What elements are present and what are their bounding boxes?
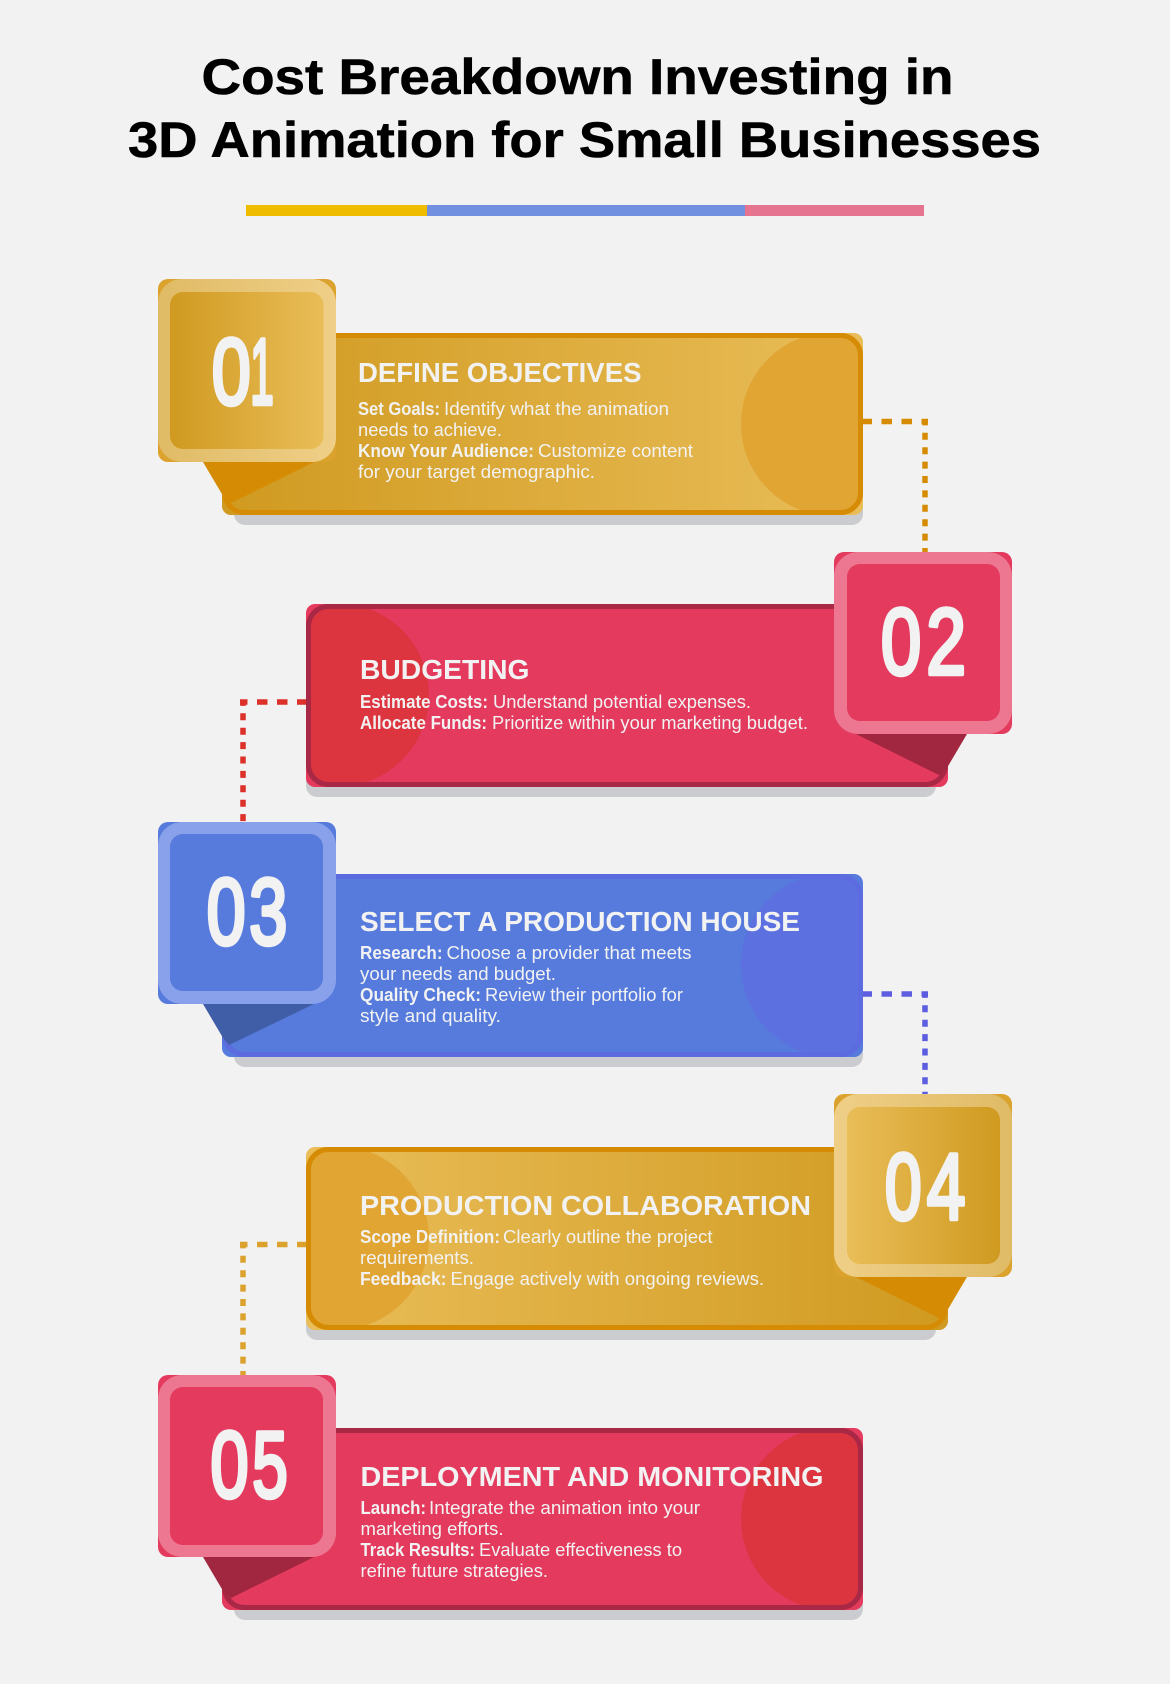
badge 02: 0 (881, 589, 921, 694)
body text (360, 1498, 700, 1581)
panel: step 2 budgeting (245, 552, 1012, 797)
body text: Launch: (360, 1498, 426, 1518)
badge 04 (834, 1094, 1012, 1277)
heading: BUDGETING (360, 654, 530, 685)
badge 01 (158, 279, 336, 462)
body text: Understand potential expenses. (493, 692, 751, 712)
heading: DEPLOYMENT AND MONITORING (360, 1461, 824, 1492)
body text: Feedback: (360, 1269, 446, 1289)
body text (360, 1227, 764, 1289)
body text: needs to achieve. (358, 420, 502, 440)
body text: Track Results: (360, 1540, 475, 1560)
badge 02 (834, 552, 1012, 734)
connector: step 3 to step 4 (863, 992, 928, 1095)
body text: Quality Check: (360, 985, 481, 1005)
body text: Identify what the animation (444, 399, 669, 419)
title (128, 49, 1041, 168)
body text: style and quality. (360, 1006, 501, 1026)
panel: step 4 production collaboration (245, 1094, 1012, 1340)
body text (360, 692, 808, 733)
body text: marketing efforts. (360, 1519, 504, 1539)
body text: Integrate the animation into your (429, 1498, 700, 1518)
badge 03 (158, 822, 336, 1004)
badge 01: 0 (212, 319, 251, 424)
body text: Review their portfolio for (485, 985, 683, 1005)
body text: Choose a provider that meets (446, 943, 692, 963)
connector: step 4 to step 5 (240, 1242, 306, 1376)
body text: Research: (360, 943, 442, 963)
badge 05: 5 (252, 1412, 288, 1517)
badge 04: 0 (885, 1134, 922, 1239)
body text: Set Goals: (358, 399, 440, 419)
badge 03: 0 (207, 859, 246, 964)
body text: for your target demographic. (358, 462, 595, 482)
body text: Scope Definition: (360, 1227, 500, 1247)
badge 02: 2 (926, 589, 966, 694)
badge 04: 4 (927, 1134, 965, 1239)
panel: step 3 select a production house (158, 822, 925, 1067)
body text: refine future strategies. (360, 1561, 548, 1581)
body text: Engage actively with ongoing reviews. (450, 1269, 764, 1289)
body text: Know Your Audience: (358, 441, 534, 461)
heading: SELECT A PRODUCTION HOUSE (360, 906, 800, 937)
tri-colour divider bar (246, 205, 924, 216)
body text: requirements. (360, 1248, 474, 1268)
connector: step 1 to step 2 (863, 419, 928, 553)
badge 03: 3 (249, 859, 287, 964)
title: Cost Breakdown Investing in (202, 49, 954, 105)
body text: Prioritize within your marketing budget. (492, 713, 808, 733)
body text: Allocate Funds: (360, 713, 487, 733)
body text (358, 399, 693, 482)
body text: Clearly outline the project (503, 1227, 712, 1247)
panel: step 1 define objectives (158, 279, 925, 525)
heading: DEFINE OBJECTIVES (358, 357, 642, 388)
body text: Customize content (538, 441, 693, 461)
badge 05: 0 (210, 1412, 248, 1517)
body text: Evaluate effectiveness to (479, 1540, 682, 1560)
body text (360, 943, 692, 1026)
badge 01: 1 (250, 319, 274, 424)
badge 05 (158, 1375, 336, 1557)
panel: step 5 deployment and monitoring (158, 1375, 925, 1620)
body text: Estimate Costs: (360, 692, 488, 712)
heading: PRODUCTION COLLABORATION (360, 1190, 811, 1221)
connector: step 2 to step 3 (240, 700, 306, 823)
title: 3D Animation for Small Businesses (128, 112, 1041, 168)
body text: your needs and budget. (360, 964, 556, 984)
